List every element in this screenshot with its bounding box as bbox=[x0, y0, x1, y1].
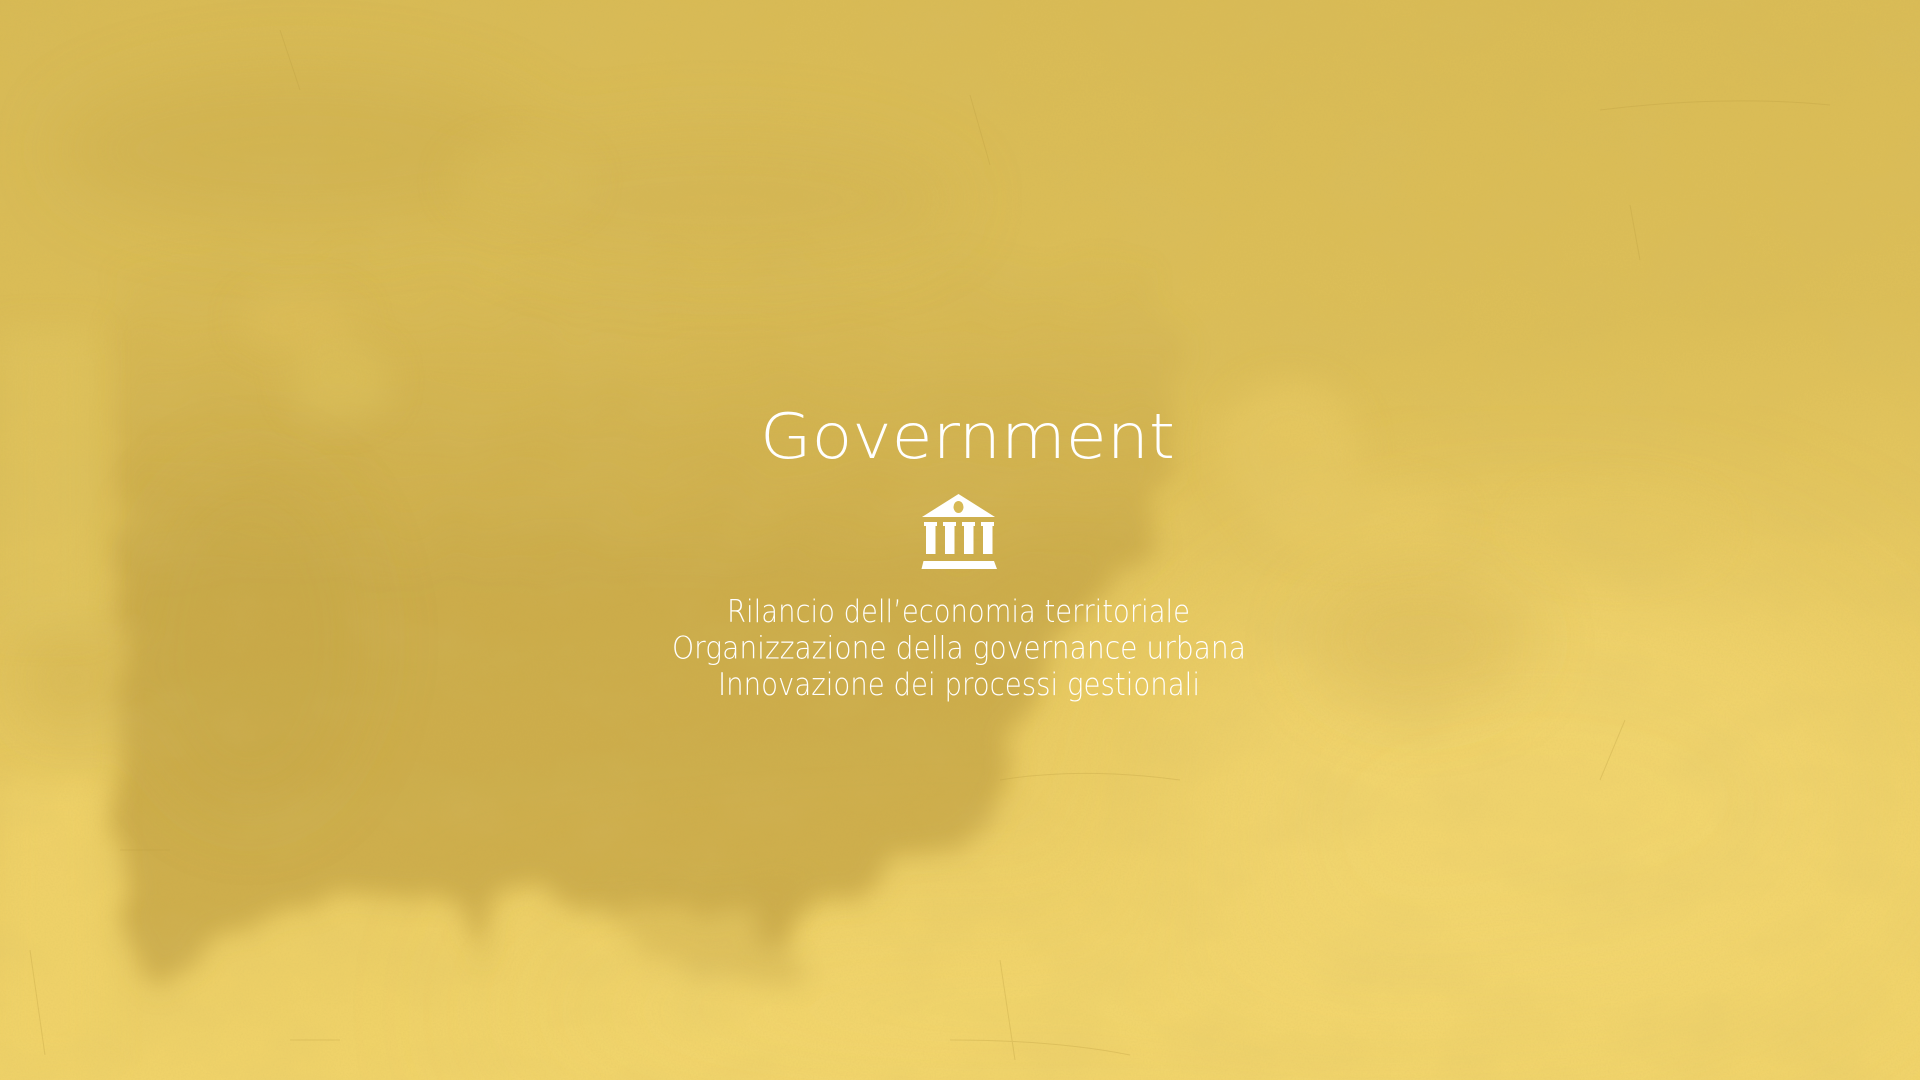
text block: priorities: Organizzazione della governance urbana bbox=[672, 630, 1246, 666]
large soft light areas bbox=[500, 560, 1910, 1075]
title: Government bbox=[760, 400, 1175, 473]
main darker wash bbox=[120, 260, 1177, 990]
lower mottled lobe of the wash bbox=[600, 880, 800, 990]
icon: government building bbox=[922, 494, 997, 569]
text block: priorities: Rilancio dell’economia territoriale bbox=[727, 594, 1190, 630]
light cloud patches bbox=[0, 140, 1720, 1070]
text block: priorities bbox=[672, 594, 1246, 703]
text block: priorities: Innovazione dei processi gestionali bbox=[718, 667, 1200, 703]
upper and left darker tone bbox=[20, 70, 1530, 820]
